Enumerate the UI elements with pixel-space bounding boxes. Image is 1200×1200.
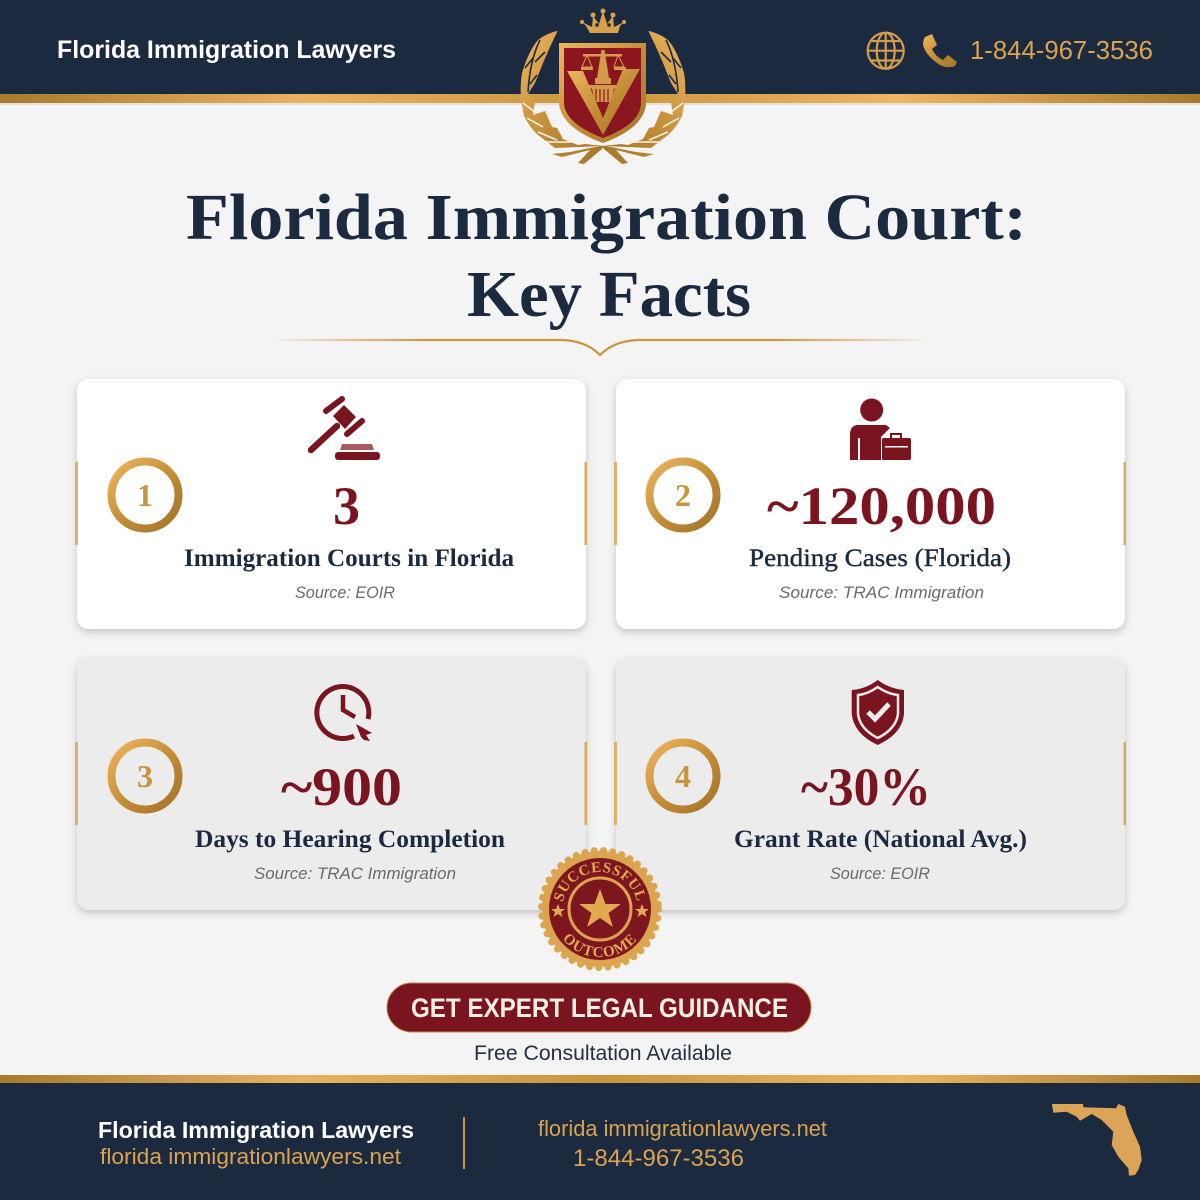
- icon: phone: [923, 34, 957, 67]
- icon: right laurel branch: [602, 31, 685, 164]
- icon: Florida map: [1052, 1104, 1142, 1176]
- source: Source: TRAC Immigration: [254, 864, 456, 883]
- title: [186, 181, 1027, 331]
- icon: left laurel branch: [521, 31, 604, 164]
- source: Source: TRAC Immigration: [779, 583, 984, 602]
- icon: shield: [559, 43, 646, 143]
- source: Source: EOIR: [830, 864, 930, 883]
- header band: [0, 0, 1200, 105]
- icon: clock with cursor: [317, 687, 372, 741]
- panel: courts fact: [75, 379, 587, 629]
- footer firm name: Florida Immigration Lawyers: [98, 1117, 414, 1143]
- footer website: florida immigrationlawyers.net: [538, 1116, 827, 1141]
- stat label: Days to Hearing Completion: [195, 826, 505, 853]
- panel: pending cases fact: [614, 379, 1126, 629]
- call to action button: GET EXPERT LEGAL GUIDANCE: [411, 993, 788, 1023]
- header firm name: Florida Immigration Lawyers: [57, 36, 396, 64]
- seal: successful outcome: [538, 847, 662, 971]
- number badge 4: 4: [675, 758, 691, 794]
- footer phone: 1-844-967-3536: [573, 1145, 744, 1172]
- seal: successful outcome: OUTCOME: [564, 934, 636, 958]
- stat value: 3: [333, 476, 360, 536]
- footer firm website: florida immigrationlawyers.net: [100, 1144, 401, 1169]
- title: Florida Immigration Court:: [186, 181, 1027, 254]
- stat label: Immigration Courts in Florida: [184, 545, 515, 572]
- stat value: ~900: [281, 757, 402, 817]
- number badge 3: 3: [137, 758, 153, 794]
- number badge 1: [112, 462, 178, 528]
- number badge 4: [650, 742, 716, 810]
- stat label: Grant Rate (National Avg.): [734, 826, 1027, 853]
- icon: globe: [868, 33, 904, 69]
- number badge 3: [112, 742, 178, 810]
- source: Source: EOIR: [295, 583, 395, 602]
- panel: hearing days fact: [75, 658, 587, 910]
- header phone number: 1-844-967-3536: [970, 35, 1153, 65]
- icon: person with briefcase: [850, 398, 911, 460]
- icon: shield check: [852, 680, 904, 745]
- stat label: Pending Cases (Florida): [749, 545, 1011, 572]
- title divider with chevron: [268, 340, 933, 355]
- call to action button: [387, 983, 811, 1032]
- seal: successful outcome: SUCCESSFUL: [554, 862, 645, 902]
- emblem: laurel crest with shield: [521, 8, 685, 164]
- number badge 2: [650, 462, 716, 528]
- stat value: ~30%: [801, 757, 931, 817]
- footer divider: [463, 1117, 465, 1169]
- icon: gavel: [311, 399, 380, 460]
- number badge 1: 1: [137, 477, 153, 513]
- consultation note: Free Consultation Available: [474, 1042, 732, 1065]
- title: Key Facts: [467, 258, 751, 331]
- panel: grant rate fact: [614, 658, 1126, 910]
- icon: crown: [580, 8, 626, 33]
- number badge 2: 2: [675, 477, 691, 513]
- stat value: ~120,000: [767, 476, 996, 536]
- footer band: [0, 1075, 1200, 1200]
